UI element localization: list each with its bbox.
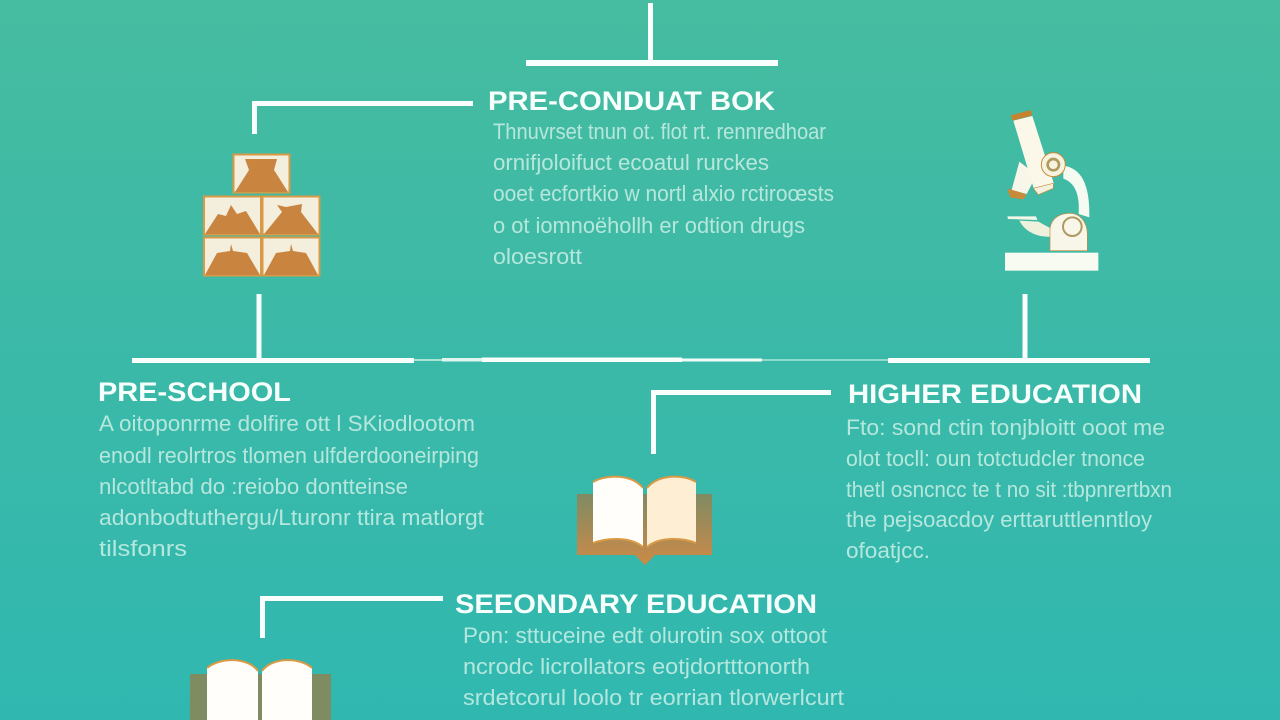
connector: centre rule: [414, 358, 888, 362]
block: bottom right: [262, 238, 320, 276]
text block: secondary education: ncrodc licrollators eotjdortttonorth: [463, 654, 810, 679]
icon: open book: [577, 477, 712, 565]
heading: higher education: HIGHER EDUCATION: [848, 379, 1142, 409]
block: top: [234, 154, 290, 192]
heading: pre-school: PRE-SCHOOL: [98, 377, 291, 407]
connector: bracket to pre-conduct book: [252, 101, 473, 134]
text block: pre-conduat book: Thnuvrset tnun ot. flot rt. rennredhoar: [493, 119, 826, 144]
block: bottom left: [204, 238, 261, 276]
text block: pre-conduat book: ooet ecfortkio w nortl alxio rctiroœsts: [493, 181, 834, 206]
text block: pre-conduat book: o ot iomnoëhollh er odtion drugs: [493, 213, 805, 238]
connector: top tee: [526, 3, 778, 66]
text block: higher education: Fto: sond ctin tonjbloitt ooot me: [846, 415, 1165, 440]
text block: pre-school: adonbodtuthergu/Lturonr ttira matlorgt: [99, 505, 484, 530]
text block: pre-conduat book: oloesrott: [493, 244, 582, 269]
connector: bracket to higher education: [651, 390, 831, 454]
connector: left tee: [132, 294, 414, 363]
text block: pre-school: [99, 411, 484, 561]
text block: pre-school: enodl reolrtros tlomen ulfderdooneirping: [99, 443, 479, 468]
heading: pre-conduat book: PRE-CONDUAT BOK: [488, 86, 776, 116]
icon: stacked blocks: [204, 154, 320, 276]
text block: higher education: thetl osncncc te t no sit :tbpnrertbxn: [846, 477, 1172, 502]
text block: higher education: olot tocll: oun totctudcler tnonce: [846, 446, 1145, 471]
text block: pre-conduat book: ornifjoloifuct ecoatul rurckes: [493, 150, 769, 175]
connector: bracket to secondary education: [260, 596, 443, 638]
connector: right tee: [888, 294, 1150, 363]
text block: secondary education: [463, 623, 844, 710]
heading: secondary education: SEEONDARY EDUCATION: [455, 589, 817, 619]
icon: open book, cropped: [190, 660, 331, 720]
icon: microscope: [1005, 110, 1098, 271]
text block: secondary education: Pon: sttuceine edt olurotin sox ottoot: [463, 623, 827, 648]
text block: higher education: the pejsoacdoy erttaruttlenntloy: [846, 507, 1152, 532]
text block: pre-school: tilsfonrs: [99, 536, 187, 561]
text block: pre-conduat book: [493, 119, 834, 269]
text block: secondary education: srdetcorul loolo tr eorrian tlorwerlcurt: [463, 685, 844, 710]
block: middle left: [204, 196, 261, 234]
text block: pre-school: nlcotltabd do :reiobo dontteinse: [99, 474, 408, 499]
text block: higher education: ofoatjcc.: [846, 538, 930, 563]
text block: higher education: [846, 415, 1172, 563]
block: middle right: [262, 196, 320, 234]
text block: pre-school: A oitoponrme dolfire ott l SKiodlootom: [99, 411, 475, 436]
